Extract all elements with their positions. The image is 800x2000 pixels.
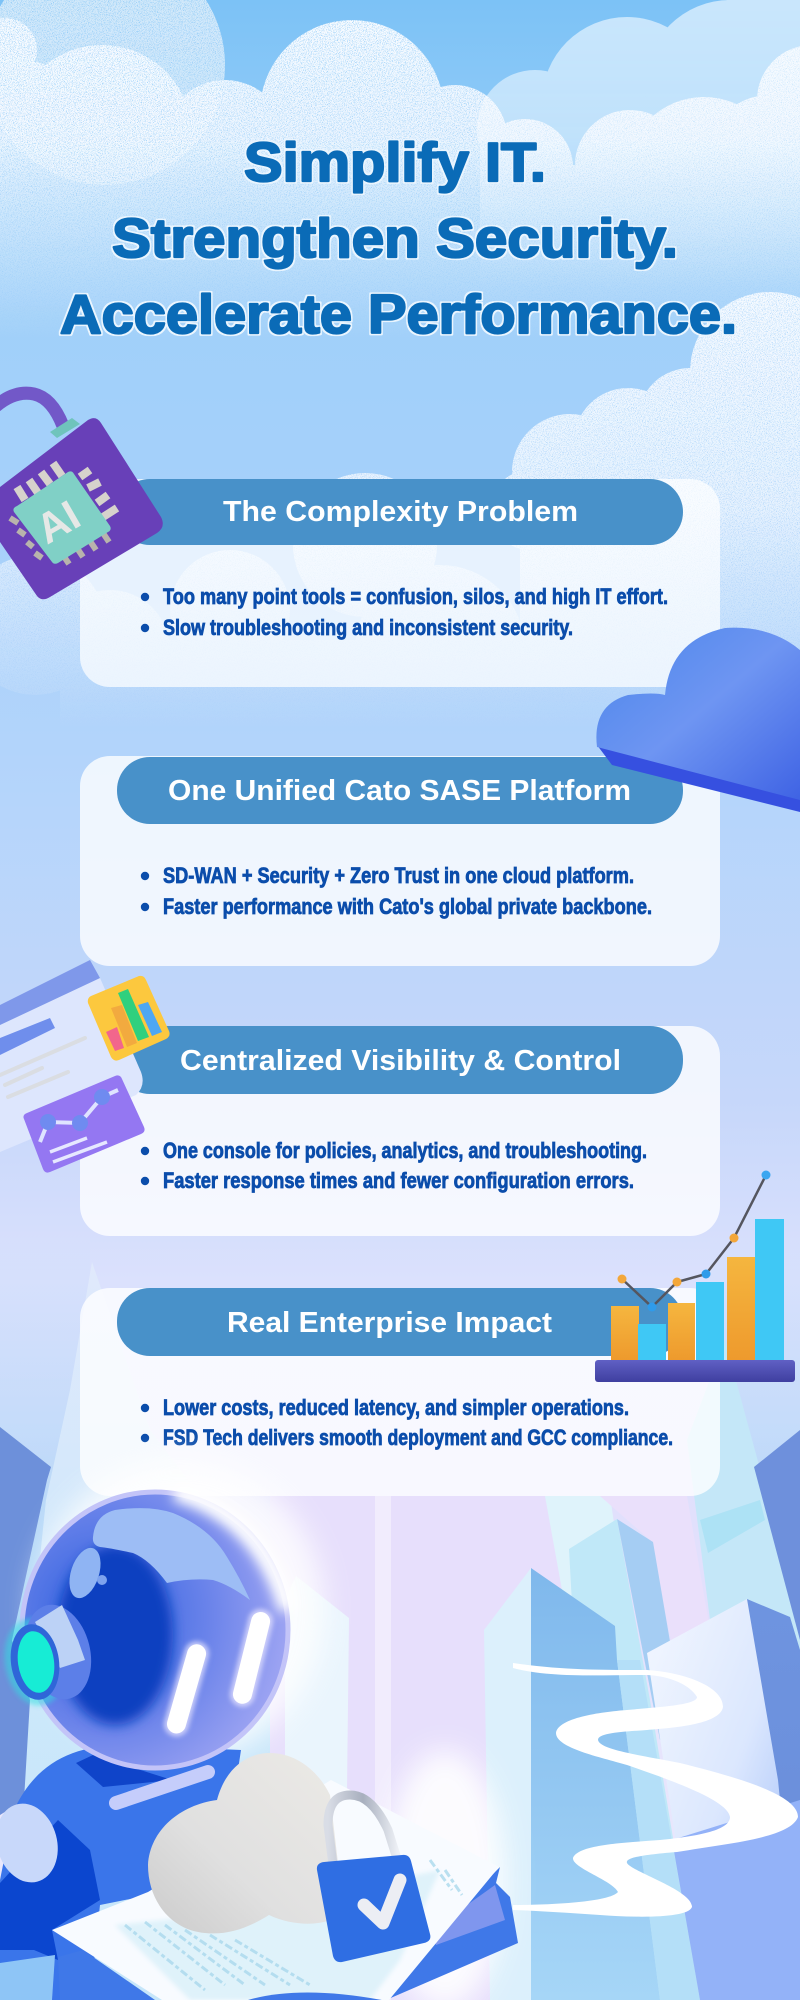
glowing pill right: [231, 1610, 272, 1706]
collar bar: [116, 1772, 208, 1803]
window: cyan patch: [700, 1500, 765, 1553]
card background: [80, 1288, 720, 1496]
cloud shadow edge: [597, 745, 800, 812]
collar shadow: [76, 1755, 172, 1787]
tower: pale right of center: [545, 1496, 640, 1800]
shackle: [0, 393, 63, 426]
panel: the complexity problem: [80, 479, 720, 687]
bullet list: [141, 584, 668, 640]
grey lines: [0, 1038, 85, 1097]
bullet list: [141, 1138, 647, 1193]
title: Strengthen Security.: [112, 207, 678, 269]
pill glow: [161, 1606, 276, 1739]
bullet list: [141, 1395, 673, 1450]
illustration: astronaut robot: [0, 1460, 325, 2000]
bullet list: [141, 863, 652, 919]
heading: One Unified Cato SASE Platform: [168, 775, 631, 807]
shoulder joint: [0, 1797, 66, 1889]
tower: lavender rear: [600, 1496, 710, 1645]
heading pill: [117, 1288, 683, 1356]
shackle: [328, 1795, 398, 1865]
bars: [611, 1219, 784, 1360]
cloud: front top: [0, 18, 800, 345]
panel: centralized visibility and control: [80, 1026, 720, 1236]
heading pill: [117, 1026, 683, 1094]
ear ring: [0, 1598, 101, 1711]
card background: [80, 756, 720, 966]
bullet list: Faster response times and fewer configuration errors.: [163, 1168, 634, 1193]
dark arm: [0, 1820, 100, 1960]
icon: blue check padlock: [317, 1795, 430, 1962]
heading pill: [117, 479, 683, 545]
white glow near book: [385, 1750, 505, 2000]
bullet list: Faster performance with Cato's global private backbone.: [163, 894, 652, 919]
tower: far left dark: [0, 1427, 51, 1815]
heading: Centralized Visibility & Control: [180, 1045, 621, 1077]
white glow: [35, 1460, 325, 1760]
blue cover: [386, 1867, 518, 2000]
icon: white cloud: [148, 1753, 340, 1933]
glowing pill left: [165, 1642, 208, 1736]
line chart tile: [23, 1075, 145, 1173]
cloud: rear top left: [0, 0, 225, 185]
bullet list: Too many point tools = confusion, silos, and high IT effort.: [163, 584, 668, 609]
tower: front right white and periwinkle: [647, 1599, 800, 2000]
grainy clouds: [0, 0, 800, 735]
bottom centre binding: [248, 1992, 382, 2000]
window title bar: [0, 960, 100, 1025]
heading: Real Enterprise Impact: [227, 1307, 552, 1339]
card background: [80, 1026, 720, 1236]
teal clasps: [50, 418, 80, 438]
bullet list: FSD Tech delivers smooth deployment and GCC compliance.: [163, 1425, 673, 1450]
book text lines: [125, 1860, 462, 1990]
chip pins: [17, 463, 117, 517]
window body: [0, 978, 143, 1152]
side haze left: [0, 1240, 90, 1640]
bottom left sleeve: [0, 1955, 55, 2000]
tower: front blue: [484, 1568, 700, 2000]
small chip pins: [10, 518, 109, 564]
chip: [13, 471, 111, 564]
tower: far right dark: [754, 1430, 800, 1640]
body: [0, 1745, 241, 2000]
icon: dashboard window: [0, 960, 170, 1173]
panel: one unified cato sase platform: [80, 756, 720, 966]
small dot: [97, 1575, 107, 1585]
white ribbon: [513, 1663, 798, 1917]
illustration: open book: [0, 1780, 518, 2000]
bullet list: Slow troubleshooting and inconsistent security.: [163, 615, 573, 640]
tower: small pale left of center: [285, 1576, 349, 1790]
bullet list: SD-WAN + Security + Zero Trust in one cloud platform.: [163, 863, 634, 888]
bottom left cover: [58, 1950, 155, 2000]
bullet list: One console for policies, analytics, and troubleshooting.: [163, 1138, 647, 1163]
cloud body: [596, 628, 800, 800]
lock body: [0, 418, 163, 599]
trend points: [618, 1170, 770, 1312]
tower: mid light blue: [569, 1519, 700, 2000]
pages: [52, 1780, 499, 2000]
card background: [80, 479, 720, 687]
background clouds: far right: [477, 0, 800, 252]
tower: behind last card left: [0, 1262, 300, 2000]
cloud: lower right and behind first card: [0, 292, 800, 735]
trend line: [622, 1175, 766, 1307]
chart tile: [88, 976, 170, 1061]
panel: real enterprise impact: [80, 1288, 720, 1496]
lock body: [317, 1855, 430, 1962]
page text tint: [115, 1870, 440, 2000]
white rim glow: [175, 1492, 288, 1610]
bullet list: Lower costs, reduced latency, and simpler operations.: [163, 1395, 629, 1420]
helmet: [22, 1492, 288, 1768]
lavender central haze: [270, 1496, 590, 2000]
chip label: AI: [28, 491, 88, 553]
small reflection: [64, 1544, 106, 1602]
title: Accelerate Performance.: [60, 283, 737, 345]
pale column center: [375, 1496, 391, 2000]
chart base: [595, 1360, 795, 1382]
lavender cover page: [432, 1885, 505, 1945]
blue content bar: [0, 1018, 55, 1055]
visor dark: [57, 1545, 173, 1725]
side haze right: [710, 1240, 800, 1640]
title: Simplify IT.: [244, 131, 546, 193]
heading pill: [117, 757, 683, 824]
icon: growth bar chart: [595, 1170, 795, 1382]
visor highlight: [93, 1508, 250, 1600]
icon: blue cloud: [596, 628, 800, 812]
check mark: [364, 1880, 400, 1923]
heading: The Complexity Problem: [223, 496, 578, 528]
title: [60, 131, 737, 345]
tower: pale far right: [687, 1340, 800, 2000]
icon: purple AI padlock: [0, 393, 163, 599]
city background: [0, 1240, 800, 2000]
